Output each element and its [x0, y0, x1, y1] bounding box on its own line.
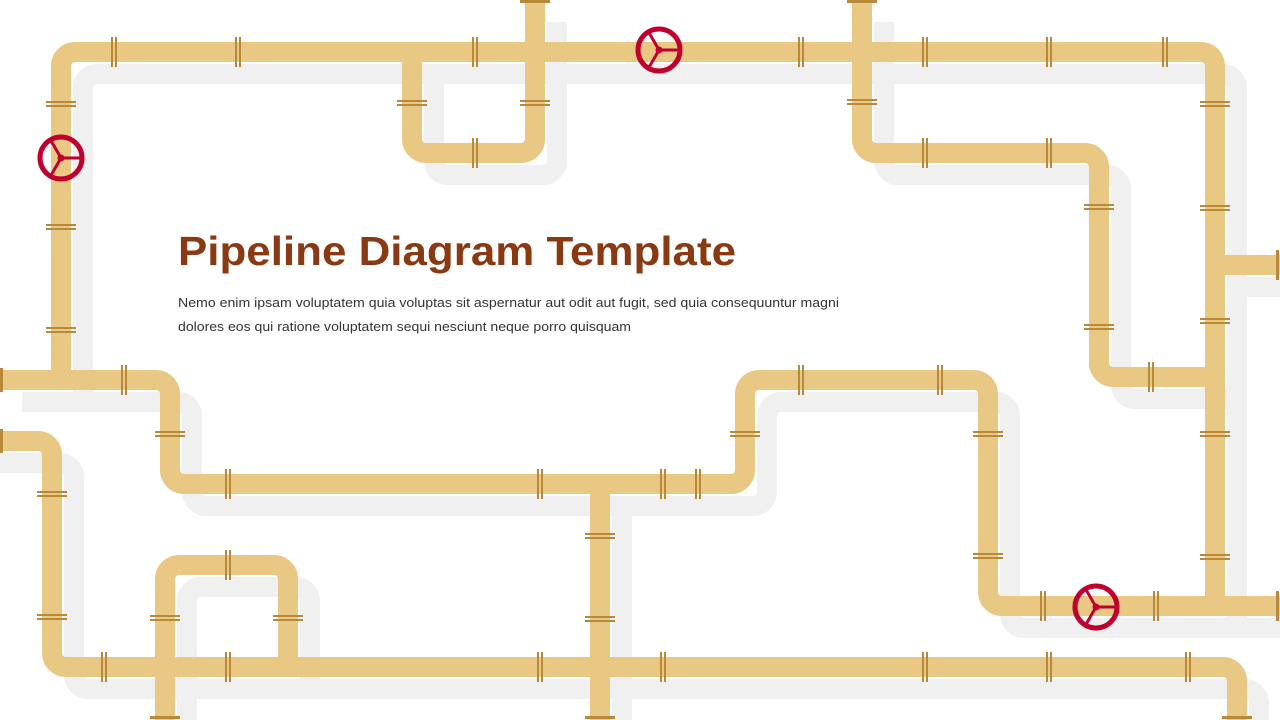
- body text: [178, 295, 839, 334]
- body text: Nemo enim ipsam voluptatem quia voluptas sit aspernatur aut odit aut fugit, sed quia consequuntur magni: [178, 295, 839, 310]
- icon: valve bottom right: [1075, 586, 1117, 628]
- icon: valve left: [40, 137, 82, 179]
- title: Pipeline Diagram Template: [178, 228, 736, 274]
- body text: dolores eos qui ratione voluptatem sequi nesciunt neque porro quisquam: [178, 319, 631, 334]
- icon: valve top: [638, 29, 680, 71]
